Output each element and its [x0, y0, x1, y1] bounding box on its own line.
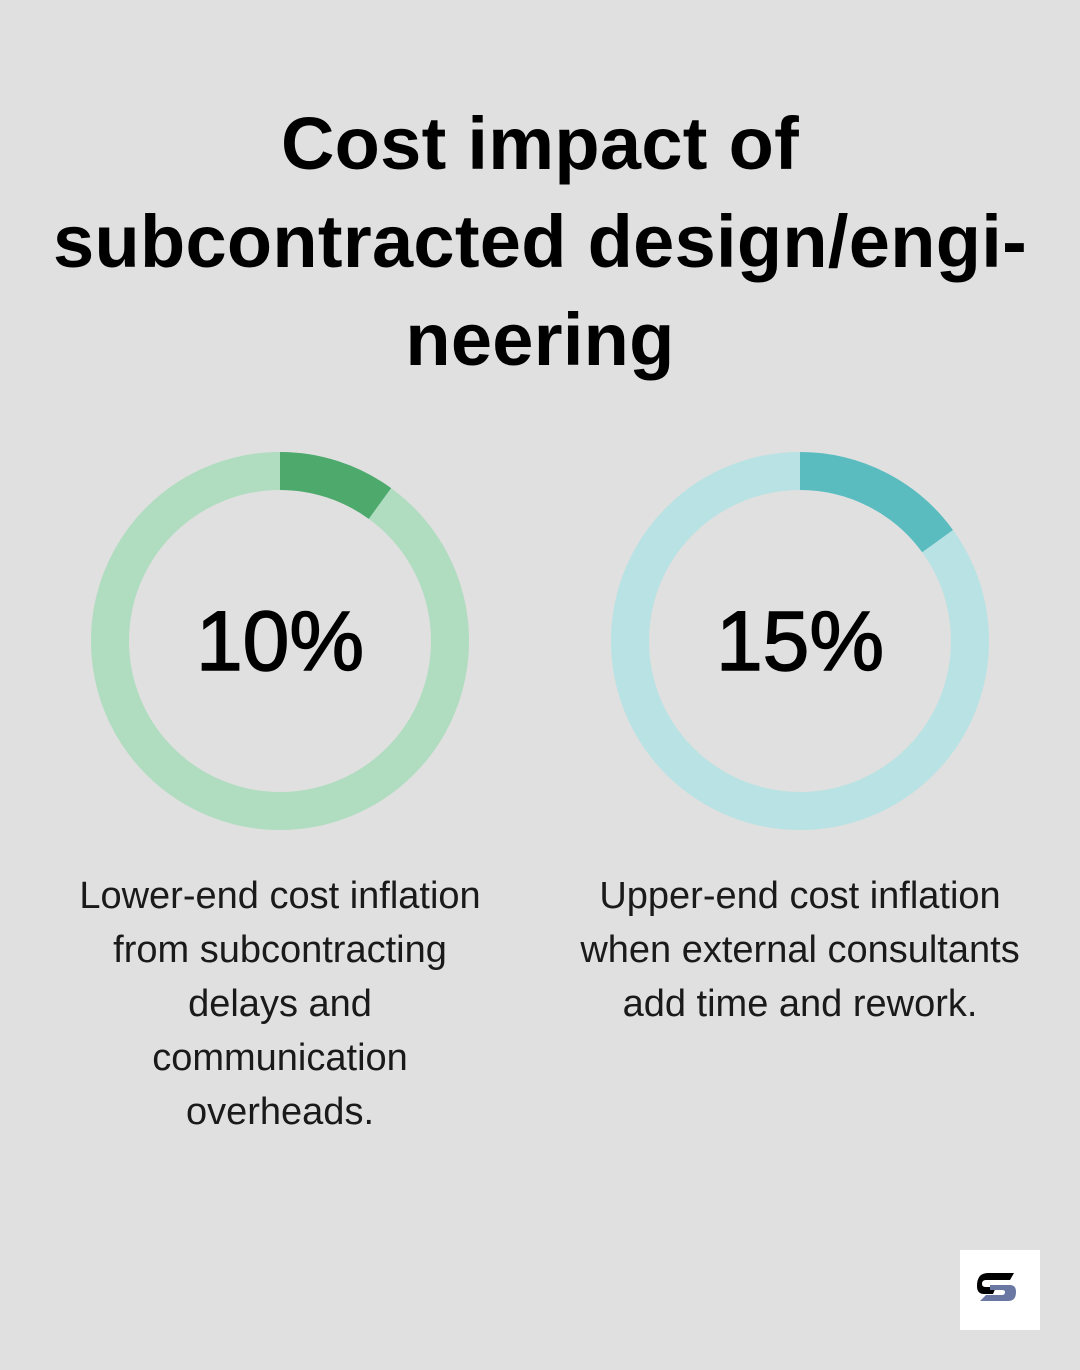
donut chart: 15%: 15% [716, 594, 884, 688]
logo [960, 1250, 1040, 1330]
donut chart: 10%: 10% [196, 594, 364, 688]
title: subcontracted design/engi- [53, 200, 1027, 283]
text: lower-end description: delays and communication overheads. [152, 983, 408, 1133]
donut chart: 10% [91, 452, 469, 830]
text: upper-end description: Upper-end cost inflation when external consultants add time and rework. [580, 875, 1020, 1025]
title: Cost impact of [281, 102, 799, 185]
title [53, 102, 1027, 381]
donut chart: 15% [611, 452, 989, 830]
text: lower-end description: Lower-end cost inflation from subcontracting [79, 875, 481, 971]
text: lower-end description [79, 875, 481, 1133]
title: neering [405, 298, 675, 381]
